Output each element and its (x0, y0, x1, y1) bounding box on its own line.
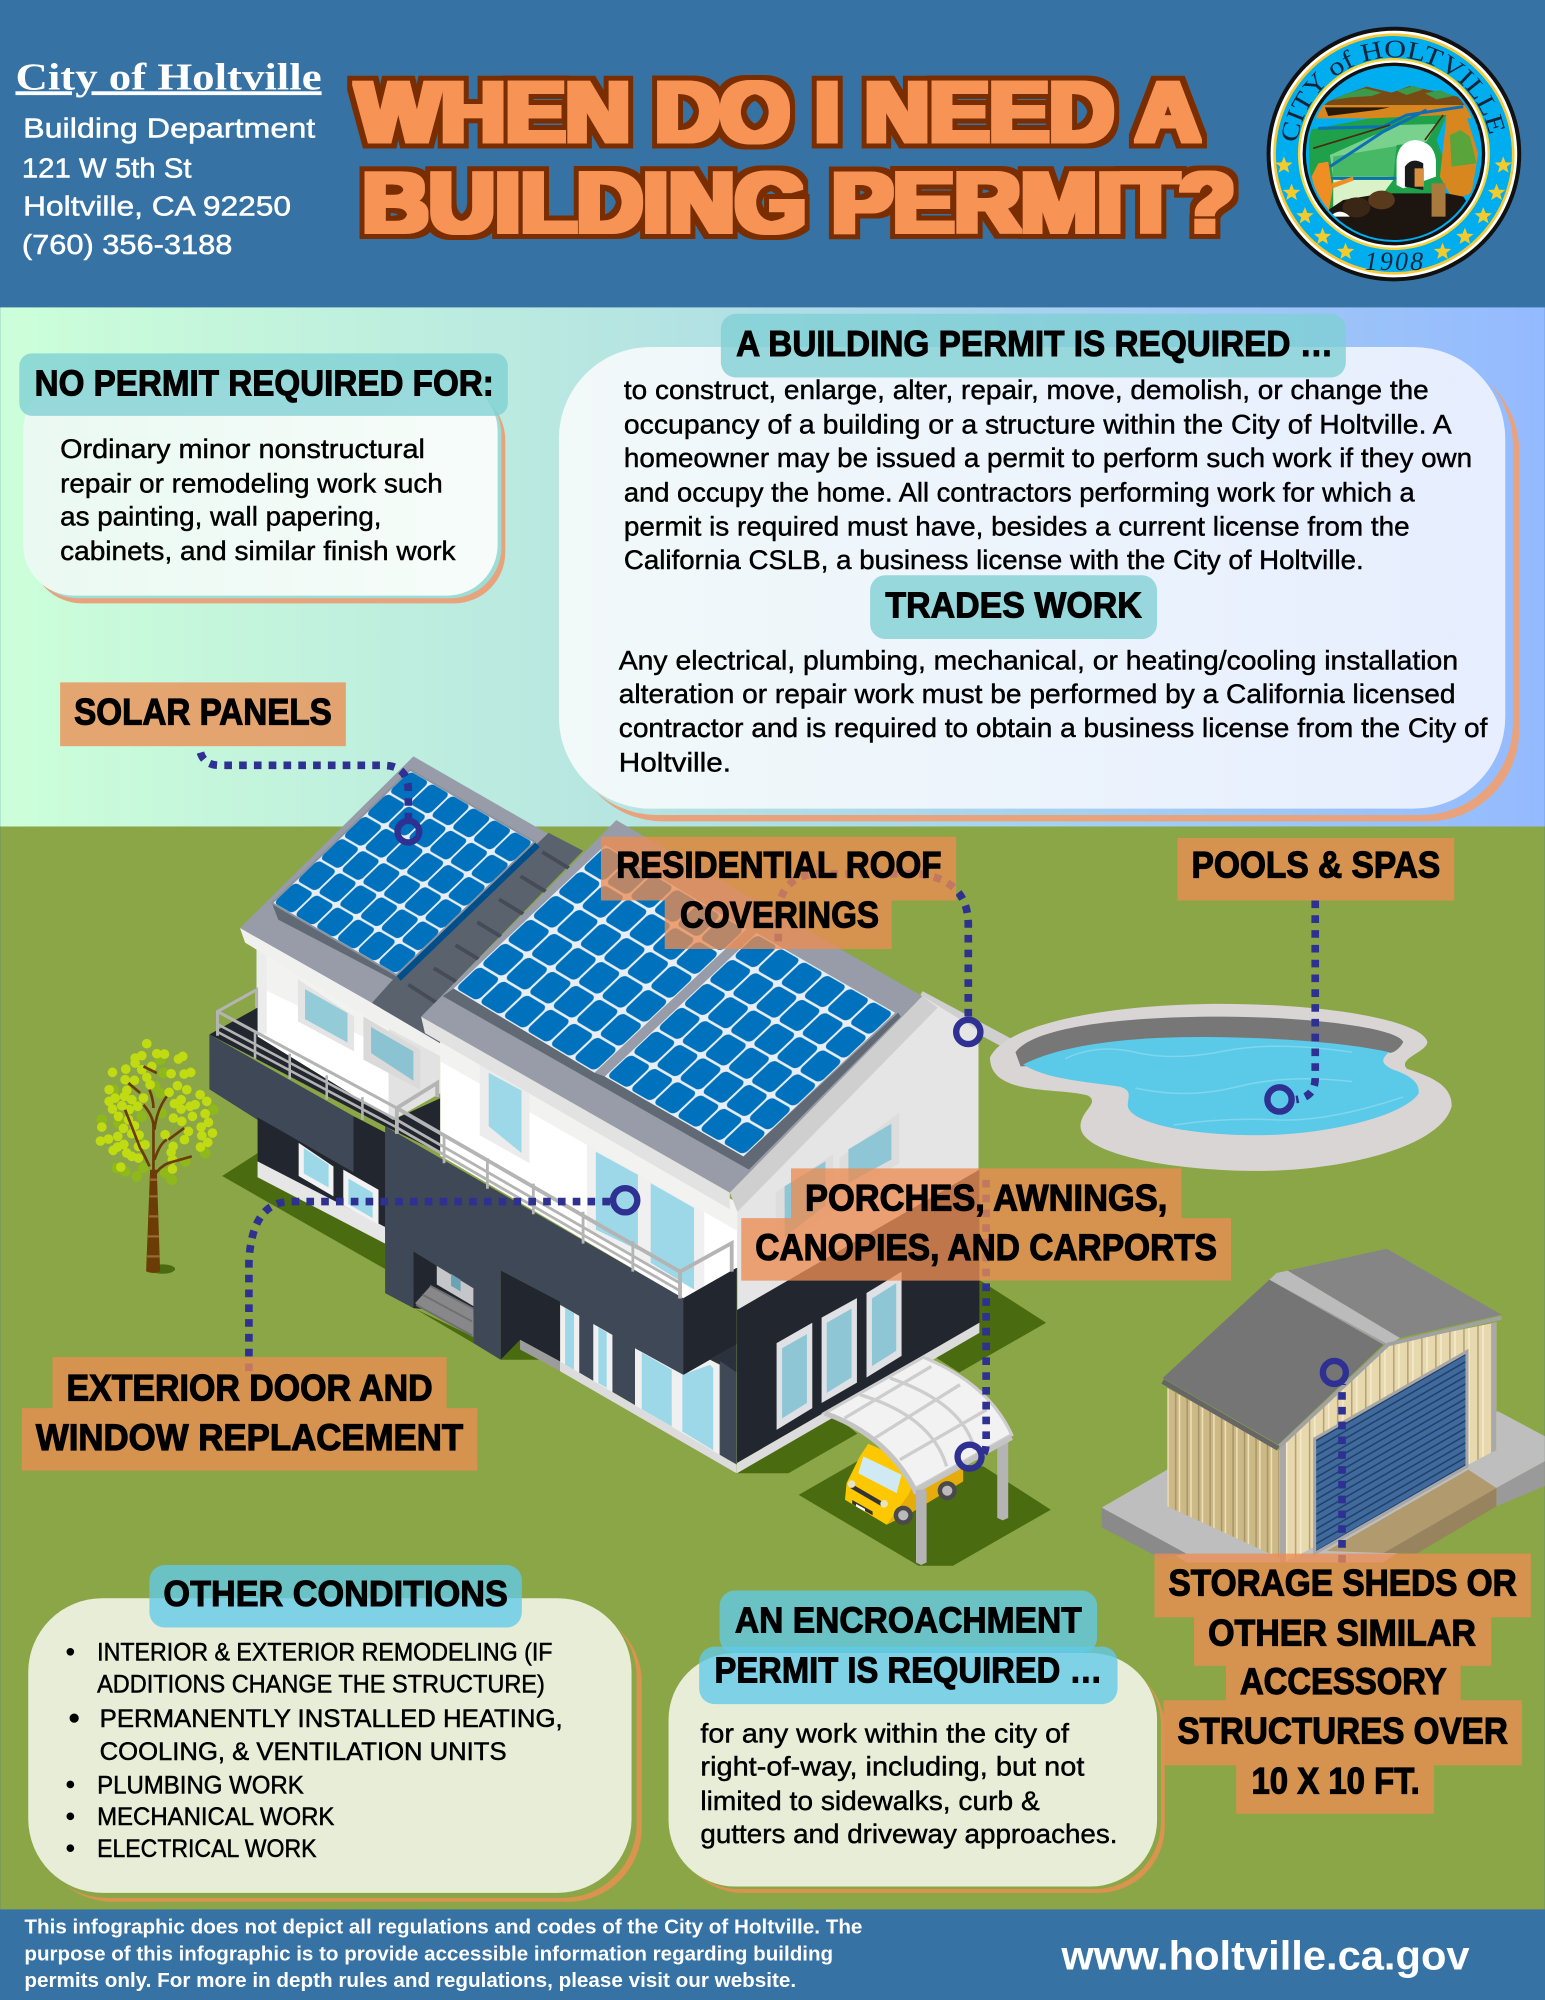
heading: no permit required (19, 353, 508, 416)
callout line: porches (958, 1180, 986, 1469)
permit body text: California CSLB, a business license with the City of Holtville. (624, 545, 1364, 575)
encroachment body text: for any work within the city of (700, 1718, 1070, 1748)
heading: other conditions: OTHER CONDITIONS (163, 1574, 508, 1614)
heading: encroachment permit: PERMIT IS REQUIRED … (714, 1650, 1102, 1690)
encroachment body text (700, 1718, 1118, 1849)
address lines: Holtville, CA 92250 (23, 191, 291, 222)
trades body text: Any electrical, plumbing, mechanical, or heating/cooling installation (619, 646, 1458, 676)
encroachment body text: limited to sidewalks, curb & (700, 1786, 1040, 1816)
lower front wall (385, 1126, 737, 1473)
footer disclaimer: purpose of this infographic is to provide accessible information regarding building (24, 1943, 833, 1965)
solar panel: rear roof (272, 770, 540, 981)
carport ground shadow (799, 1455, 1051, 1566)
header band (0, 0, 1545, 307)
gable wall (737, 996, 978, 1314)
panel: building permit required (559, 314, 1519, 821)
lawn background (0, 827, 1545, 1909)
illustration: storage shed (1102, 1249, 1545, 1562)
seal lettering: CITY of HOLTVILLE (1282, 40, 1505, 140)
panel: encroachment permit (669, 1591, 1165, 1893)
rear upper wall (257, 938, 440, 1120)
label: storage sheds: OTHER SIMILAR (1208, 1612, 1476, 1653)
slab (1102, 1411, 1545, 1562)
label: storage sheds (1155, 1554, 1531, 1814)
rear balcony railing (218, 990, 397, 1128)
gradient background band (0, 307, 1545, 827)
label: storage sheds: ACCESSORY (1240, 1661, 1447, 1702)
label: porches awnings canopies carports: PORCHES, AWNINGS, (805, 1177, 1167, 1218)
label: residential roof coverings: COVERINGS (680, 894, 879, 935)
heading: encroachment permit: AN ENCROACHMENT (735, 1601, 1082, 1641)
label: residential roof coverings: RESIDENTIAL ROOF (616, 845, 942, 886)
illustration: pool (990, 1004, 1452, 1171)
house ground shadows (222, 1153, 1046, 1473)
label: residential roof coverings (601, 837, 956, 949)
callout line: roof coverings (778, 874, 980, 1044)
conditions list: ELECTRICAL WORK (97, 1835, 317, 1863)
apron (1327, 1470, 1496, 1553)
city seal (1266, 26, 1522, 282)
illustration: tree (100, 1044, 213, 1274)
seal year: 1908 (1365, 247, 1423, 276)
front wall (1280, 1322, 1496, 1562)
trades body text (619, 646, 1488, 778)
callout line: doors and windows (249, 1188, 637, 1371)
seal scene (1308, 86, 1478, 240)
entry steps (415, 1286, 473, 1337)
rear roof (240, 756, 549, 1003)
ground floor windows (560, 1268, 737, 1473)
encroachment body text: right-of-way, including, but not (700, 1752, 1085, 1782)
conditions list (67, 1639, 563, 1863)
seal stars (1275, 156, 1512, 259)
illustration: carport and car (799, 1357, 1051, 1566)
label: porches awnings canopies carports (741, 1168, 1231, 1281)
conditions list: ADDITIONS CHANGE THE STRUCTURE) (97, 1671, 545, 1699)
front main wall (440, 1036, 737, 1298)
title: BUILDING PERMIT? (362, 156, 1235, 251)
trades body text: Holtville. (619, 748, 731, 778)
ridge (920, 996, 1008, 1043)
front roof (421, 820, 922, 1193)
conditions list: INTERIOR & EXTERIOR REMODELING (IF (97, 1639, 552, 1667)
no permit body text: as painting, wall papering, (60, 502, 382, 532)
conditions list: PERMANENTLY INSTALLED HEATING, (100, 1705, 563, 1733)
heading: trades work: TRADES WORK (885, 585, 1142, 625)
trades body text: alteration or repair work must be performed by a California licensed (619, 679, 1456, 709)
address lines: 121 W 5th St (22, 152, 192, 183)
footer disclaimer: This infographic does not depict all regulations and codes of the City of Holtville. The (24, 1917, 862, 1939)
rear balcony slab and lower wall (209, 1034, 385, 1244)
heading: permit required: A BUILDING PERMIT IS REQUIRED … (736, 324, 1333, 364)
label: exterior door and window replacement (22, 1357, 477, 1471)
website: www.holtville.ca.gov (1060, 1932, 1470, 1978)
label: exterior door and window replacement: EXTERIOR DOOR AND (67, 1368, 433, 1409)
gable windows (776, 1112, 899, 1250)
address lines: (760) 356-3188 (22, 229, 232, 260)
heading: trades work (870, 575, 1157, 639)
trades body text: contractor and is required to obtain a business license from the City of (619, 713, 1488, 743)
solar panel: front right (605, 933, 895, 1156)
solar panel: front left (454, 845, 746, 1073)
heading: other conditions (149, 1565, 522, 1628)
panel: other conditions (28, 1565, 642, 1902)
right wall windows (777, 1272, 902, 1430)
pool water (1023, 1037, 1419, 1135)
shed roof (1288, 1249, 1501, 1338)
front wall windows and doors (480, 1061, 704, 1295)
footer disclaimer (24, 1917, 862, 1992)
city contact block (15, 56, 322, 260)
left wall (1167, 1388, 1279, 1558)
label: storage sheds: 10 X 10 FT. (1251, 1760, 1420, 1801)
title (356, 66, 1235, 251)
no permit body text (60, 434, 456, 566)
front wall top band (440, 1036, 737, 1231)
label: pools and spas (1177, 838, 1454, 901)
city name: City of Holtville (15, 56, 322, 98)
front balcony railing (397, 1083, 732, 1298)
heading: no permit required: NO PERMIT REQUIRED FOR: (35, 363, 494, 403)
callout line: storage (1323, 1361, 1346, 1562)
conditions list: COOLING, & VENTILATION UNITS (100, 1738, 507, 1766)
label: porches awnings canopies carports: CANOPIES, AND CARPORTS (755, 1227, 1217, 1268)
panel: no permit required (19, 353, 508, 603)
permit body text: to construct, enlarge, alter, repair, move, demolish, or change the (624, 375, 1429, 405)
label: solar panels: SOLAR PANELS (74, 691, 332, 732)
carport rear post (997, 1439, 1008, 1520)
permit body text: and occupy the home. All contractors performing work for which a (624, 477, 1415, 507)
address lines: Building Department (23, 113, 315, 144)
permit body text (624, 375, 1472, 575)
label: exterior door and window replacement: WINDOW REPLACEMENT (36, 1417, 464, 1458)
carport roof (825, 1357, 1012, 1489)
conditions list: PLUMBING WORK (97, 1771, 304, 1799)
label: storage sheds: STORAGE SHEDS OR (1169, 1563, 1517, 1604)
encroachment body text: gutters and driveway approaches. (700, 1819, 1118, 1849)
no permit body text: cabinets, and similar finish work (60, 536, 456, 566)
pool ripples (1065, 1046, 1403, 1125)
label: pools and spas: POOLS & SPAS (1192, 845, 1440, 886)
footer disclaimer: permits only. For more in depth rules and regulations, please visit our website. (24, 1970, 796, 1992)
rear balcony floor (209, 1008, 440, 1153)
callout line: pools (1267, 901, 1315, 1112)
footer band (0, 1909, 1545, 2000)
heading: permit required (721, 314, 1346, 378)
no permit body text: repair or remodeling work such (60, 468, 443, 498)
title: WHEN DO I NEED A (356, 66, 1200, 161)
roller door (1315, 1351, 1467, 1554)
callout line: solar panels (200, 753, 419, 842)
illustration: house (209, 756, 1046, 1473)
permit body text: homeowner may be issued a permit to perform such work if they own (624, 443, 1472, 473)
dark right wall (737, 1170, 979, 1463)
car (845, 1444, 963, 1525)
label: solar panels (60, 682, 346, 746)
permit body text: occupancy of a building or a structure within the City of Holtville. A (624, 410, 1452, 440)
label: storage sheds: STRUCTURES OVER (1177, 1711, 1508, 1752)
carport front post (916, 1490, 927, 1565)
no permit body text: Ordinary minor nonstructural (60, 434, 425, 464)
conditions list: MECHANICAL WORK (97, 1803, 335, 1831)
permit body text: permit is required must have, besides a current license from the (624, 512, 1410, 542)
heading: encroachment permit (699, 1591, 1118, 1704)
address lines (22, 113, 315, 260)
